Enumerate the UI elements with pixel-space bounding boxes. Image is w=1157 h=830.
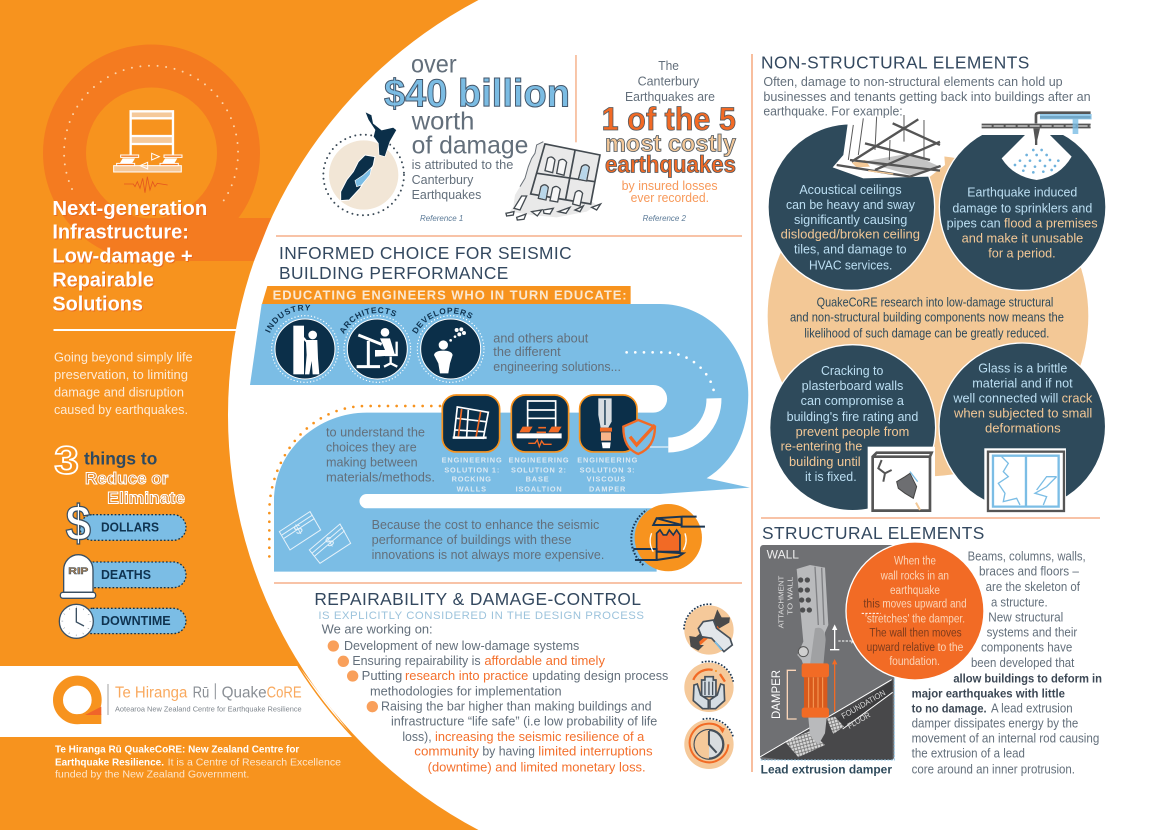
heading: 3 things: Reduce or <box>85 469 169 488</box>
icon: cracked wall <box>868 447 935 512</box>
list: limited interruptions <box>538 744 653 759</box>
circle: plasterboard walls: Cracking to <box>821 363 883 378</box>
text: cost: performance of buildings with these <box>372 532 572 547</box>
text: structural description: New structural <box>988 610 1063 625</box>
logo: Te Hiranga Rū QuakeCoRE: CoRE <box>267 685 302 702</box>
stat: 1 of the 5: Canterbury <box>638 73 700 88</box>
list: research into practice <box>405 668 528 683</box>
title: Next-generation <box>52 197 207 220</box>
caption: solution 3: DAMPER <box>589 484 626 493</box>
list: infrastructure “life safe” (i.e low probability of life <box>391 714 657 729</box>
heading: STRUCTURAL ELEMENTS <box>762 523 984 543</box>
Q emblem ring <box>64 66 271 261</box>
text: structural description: the extrusion of a lead <box>912 746 1025 761</box>
caption: solution 1: WALLS <box>457 484 486 493</box>
text: and others <box>493 330 621 374</box>
icon: damaged building <box>506 142 601 220</box>
footer text: Earthquake Resilience. <box>55 758 164 769</box>
title: Repairable <box>52 269 154 292</box>
stat: 1 of the 5: earthquakes <box>605 151 736 178</box>
list: by having <box>482 744 535 759</box>
circles: walls and glass <box>770 343 1106 512</box>
icon: viscous damper <box>580 395 637 452</box>
icon: money notes: $ <box>323 533 337 550</box>
text: structural description: movement of an internal rod causing <box>912 730 1099 745</box>
circle: sprinklers: for a period. <box>988 245 1056 260</box>
text: QuakeCoRE research <box>790 296 1064 340</box>
stat: over $40 billion: over <box>411 51 457 79</box>
circle: architects: ARCHITECTS <box>340 307 396 334</box>
text: to understand: choices they are <box>326 440 417 455</box>
divider <box>574 55 578 142</box>
intro text <box>54 350 193 417</box>
intro: earthquake. For example: <box>763 104 903 119</box>
text: structural description: a structure. <box>991 594 1048 609</box>
panel: damage statistics <box>323 51 737 223</box>
intro text: caused by earthquakes. <box>54 402 188 417</box>
list: Raising the bar higher than making buildings and <box>381 699 652 714</box>
heading: 3 things <box>54 438 185 507</box>
icon: clock <box>684 719 734 769</box>
diagram: lead extrusion damper: DAMPER <box>769 670 783 719</box>
panel: structural elements <box>760 523 1102 777</box>
callout: wall rocks: to the <box>938 640 964 654</box>
list <box>322 621 669 775</box>
circle: glass: when subjected to small <box>953 406 1092 421</box>
orange left background <box>0 0 478 830</box>
icon: rocking walls <box>442 395 500 452</box>
list: affordable and timely <box>484 653 605 668</box>
circle: sprinklers <box>939 113 1106 290</box>
stat: over $40 billion: Earthquakes <box>412 187 482 202</box>
circle: industry <box>265 304 339 383</box>
caption: solution 3 <box>577 455 638 493</box>
ribbon dotted path and arc <box>269 352 714 565</box>
footer text: funded by the New Zealand Government. <box>55 769 249 780</box>
panel: non-structural elements <box>761 52 1106 476</box>
diagram: lead extrusion damper: FOUNDATION <box>840 688 887 721</box>
diagram: lead extrusion damper: FLOOR <box>846 710 872 731</box>
circle: developers <box>412 308 485 383</box>
pill: dollars: DOLLARS <box>101 521 159 535</box>
circle: glass: deformations <box>985 421 1061 436</box>
circle: plasterboard walls <box>770 345 936 512</box>
circle: acoustical ceilings: tiles, and damage to <box>794 242 907 257</box>
circle: sprinklers: flood a premises <box>1004 216 1098 231</box>
text: and others: the different <box>493 344 561 359</box>
stat: over $40 billion: worth <box>411 107 474 135</box>
circle: acoustical ceilings: can be heavy and sway <box>786 197 915 212</box>
circle: plasterboard walls: prevent people from <box>796 424 909 439</box>
heading: NON-STRUCTURAL ELEMENTS <box>761 52 1029 72</box>
pill: downtime: DOWNTIME <box>101 614 171 628</box>
heading: REPAIRABILITY & DAMAGE-CONTROL <box>314 589 641 609</box>
circle: sprinklers: and make it unusable <box>962 231 1083 246</box>
list: increasing the seismic resilience of a <box>435 729 645 744</box>
text: structural description: Beams, columns, walls, <box>968 549 1086 564</box>
damper body <box>797 565 829 745</box>
stat: 1 of the 5: 1 of the 5 <box>602 100 736 137</box>
circle: acoustical ceilings: HVAC services. <box>809 257 892 272</box>
list: community <box>414 744 479 759</box>
title: Infrastructure: <box>52 221 189 244</box>
caption: solution 2: SOLUTION 2: <box>511 465 566 474</box>
intro text: preservation, to limiting <box>54 367 188 382</box>
title <box>52 197 207 316</box>
callout: wall rocks: 'stretches' the damper. <box>865 611 965 625</box>
icon: New Zealand map <box>323 112 404 215</box>
title: Solutions <box>52 293 143 316</box>
heading: BUILDING PERFORMANCE <box>279 263 508 283</box>
stat: 1 of the 5: most costly <box>605 131 737 158</box>
caption: solution 2 <box>509 455 569 493</box>
icon: hands and building <box>631 504 705 571</box>
text: and others: engineering solutions... <box>493 359 621 374</box>
icon: base isolated building <box>114 111 182 193</box>
callout: wall rocks: When the <box>894 553 936 567</box>
stat: over $40 billion: of damage <box>412 131 528 159</box>
text: cost: Because the cost to enhance the seismic <box>372 517 600 532</box>
circle: plasterboard walls: re-entering the <box>781 439 862 454</box>
footer text <box>55 745 341 780</box>
text: structural description: systems and their <box>987 625 1078 640</box>
text: QuakeCoRE research: likelihood of such damage can be greatly reduced. <box>804 326 1049 340</box>
caption: solution 3: VISCOUS <box>587 474 625 483</box>
circle: acoustical ceilings <box>768 115 945 290</box>
stat: over $40 billion <box>384 51 570 223</box>
logo: Te Hiranga Rū QuakeCoRE: Quake <box>222 685 267 702</box>
circle: acoustical ceilings: dislodged/broken ceiling <box>781 227 920 242</box>
logo: Te Hiranga Rū QuakeCoRE: Rū <box>193 685 209 702</box>
divider under title <box>54 329 236 331</box>
icon: money notes <box>279 512 351 563</box>
heading <box>279 243 572 283</box>
pill: deaths: DEATHS <box>101 568 151 582</box>
circle: glass: material and if not <box>972 376 1073 391</box>
icon: money notes: $ <box>291 521 306 538</box>
white logo band <box>0 666 353 737</box>
list: updating design process <box>532 668 669 683</box>
text: cost: innovations is not always more expensive. <box>372 547 604 562</box>
text: to understand: making between <box>326 455 418 470</box>
diagram: lead extrusion damper: ATTACHMENT <box>776 575 785 628</box>
heading: INFORMED CHOICE FOR SEISMIC <box>279 243 572 263</box>
callout: wall rocks: earthquake <box>890 583 940 597</box>
list: We are working on: <box>322 621 433 636</box>
caption: solution 1: ENGINEERING <box>442 455 502 464</box>
text: and others: and others about <box>493 330 589 345</box>
text: structural description: allow buildings to deform in <box>953 671 1102 685</box>
icon: cracked glass <box>984 448 1066 512</box>
circle: plasterboard walls: can compromise a <box>801 393 905 408</box>
pill: dollars: $ <box>66 496 91 552</box>
circle: architects <box>340 307 412 383</box>
text: structural description: been developed that <box>971 655 1075 670</box>
stat: over $40 billion: Reference 1 <box>420 213 463 223</box>
footer text: It is a Centre of Research Excellence <box>168 758 341 769</box>
stat: 1 of the 5: Reference 2 <box>643 213 686 223</box>
curve line on logo band <box>298 666 353 737</box>
diagram: lead extrusion damper <box>760 545 894 760</box>
icon: ceiling grid <box>833 115 945 178</box>
arrows <box>787 613 881 719</box>
stat: over $40 billion: $40 billion <box>384 72 570 116</box>
text: QuakeCoRE research: QuakeCoRE research into low-damage structural <box>817 296 1053 310</box>
stat: over $40 billion: is attributed to the <box>412 157 513 172</box>
list: methodologies for implementation <box>370 683 562 698</box>
subheading: IS EXPLICITLY CONSIDERED IN THE DESIGN PROCESS <box>318 610 644 622</box>
icon: shield <box>623 420 655 454</box>
text: to understand <box>326 425 435 485</box>
text: structural description: to no damage. <box>912 701 987 715</box>
list: loss), <box>402 729 432 744</box>
text: structural description: components have <box>981 640 1072 655</box>
text: to understand: to understand the <box>326 425 425 440</box>
circle: acoustical ceilings: significantly causing <box>794 212 907 227</box>
pill: downtime <box>59 604 186 638</box>
intro text: damage and disruption <box>54 385 184 400</box>
blue ribbon <box>250 304 750 572</box>
text: structural description: core around an inner protrusion. <box>912 761 1075 776</box>
heading: 3 things: 3 <box>54 438 79 482</box>
logo: Te Hiranga Rū QuakeCoRE <box>58 681 302 724</box>
circle: acoustical ceilings: Acoustical ceilings <box>799 182 902 197</box>
icon: wrench <box>684 604 734 655</box>
list: (downtime) and limited monetary loss. <box>428 760 646 775</box>
circle: sprinklers: Earthquake induced <box>967 185 1077 200</box>
callout: wall rocks: this <box>863 597 880 611</box>
caption: solution 3: ENGINEERING <box>577 455 638 464</box>
text: to understand: materials/methods. <box>326 470 435 485</box>
stat: 1 of the 5: Earthquakes are <box>625 89 715 104</box>
text: structural description <box>912 549 1102 776</box>
icon: sprinkler <box>980 113 1093 180</box>
callout: wall rocks: moves upward and <box>882 597 967 611</box>
heading: 3 things: Eliminate <box>107 488 185 507</box>
list: Putting <box>362 668 402 683</box>
intro <box>763 74 1091 119</box>
stat: 1 of the 5 <box>602 58 737 223</box>
pill: dollars <box>66 496 186 552</box>
circle: industry: INDUSTRY <box>265 304 310 333</box>
icon: base isolation <box>511 395 569 452</box>
panel: repairability <box>314 589 734 775</box>
callout: wall rocks <box>846 542 984 680</box>
text: structural description: damper dissipates energy by the <box>912 716 1078 731</box>
caption: Lead extrusion damper <box>761 763 892 777</box>
circle: sprinklers: pipes can <box>947 216 1001 231</box>
caption: solution 1 <box>442 455 502 493</box>
stat: 1 of the 5: by insured losses <box>622 178 718 193</box>
circle: plasterboard walls: it is fixed. <box>805 469 857 484</box>
circle: glass: well connected will <box>952 391 1058 406</box>
circle: plasterboard walls: plasterboard walls <box>802 378 904 393</box>
circle: glass: crack <box>1062 391 1093 406</box>
circle: plasterboard walls: building until <box>789 454 861 469</box>
list: Development of new low-damage systems <box>344 638 580 653</box>
callout: wall rocks: The wall then moves <box>869 625 962 639</box>
diagram: lead extrusion damper: WALL <box>767 547 799 561</box>
logo: Te Hiranga Rū QuakeCoRE: Aotearoa New Zealand Centre for Earthquake Resilience <box>115 705 302 714</box>
text: structural description: are the skeleton of <box>986 579 1080 594</box>
text: structural description: major earthquakes with little <box>912 686 1065 700</box>
icon: Q <box>58 681 101 724</box>
stat: 1 of the 5: ever recorded. <box>631 190 709 205</box>
circle: plasterboard walls: building's fire rating and <box>787 409 918 424</box>
circle: developers: DEVELOPERS <box>412 308 472 334</box>
caption: solution 3: SOLUTION 3: <box>580 465 635 474</box>
footer text: Te Hiranga Rū QuakeCoRE: New Zealand Centre for <box>55 745 299 756</box>
diagram: lead extrusion damper: TO WALL <box>786 577 795 615</box>
caption: solution 1: SOLUTION 1: <box>444 465 499 474</box>
panel: 3 things to reduce <box>54 438 186 638</box>
intro: businesses and tenants getting back into buildings after an <box>763 89 1091 104</box>
pill: deaths <box>60 555 186 598</box>
banner: EDUCATING ENGINEERS WHO IN TURN EDUCATE: <box>273 287 627 302</box>
text: QuakeCoRE research: and non-structural building components now means the <box>790 311 1064 325</box>
circle: sprinklers: damage to sprinklers and <box>952 201 1092 216</box>
callout: wall rocks: upward relative <box>867 640 935 654</box>
panel: informed choice <box>250 243 750 572</box>
caption: solution 1: ROCKING <box>452 474 491 483</box>
heading: 3 things: things to <box>84 448 157 468</box>
column divider <box>751 54 753 772</box>
tan backing circle <box>768 156 1088 476</box>
logo: Te Hiranga Rū QuakeCoRE: Te Hiranga <box>115 685 188 702</box>
title: Low-damage + <box>52 245 193 268</box>
stat: 1 of the 5: The <box>658 58 679 73</box>
text: structural description: braces and floors – <box>979 564 1080 579</box>
stat: over $40 billion: Canterbury <box>412 172 474 187</box>
circle: glass: Glass is a brittle <box>978 361 1067 376</box>
text: cost <box>372 517 604 562</box>
caption: solution 2: BASE <box>526 474 549 483</box>
intro: Often, damage to non-structural elements can hold up <box>763 74 1063 89</box>
pill: deaths: RIP <box>68 566 88 576</box>
text: structural description: A lead extrusion <box>991 700 1073 715</box>
callout: wall rocks: foundation. <box>889 654 940 668</box>
caption: solution 2: ENGINEERING <box>509 455 569 464</box>
list: Ensuring repairability is <box>352 653 481 668</box>
circle: glass <box>939 343 1106 512</box>
icon: hands and building <box>684 661 734 712</box>
callout: wall rocks: wall rocks in an <box>880 568 949 582</box>
caption: solution 2: ISOALTION <box>516 484 562 493</box>
intro text: Going beyond simply life <box>54 350 193 365</box>
